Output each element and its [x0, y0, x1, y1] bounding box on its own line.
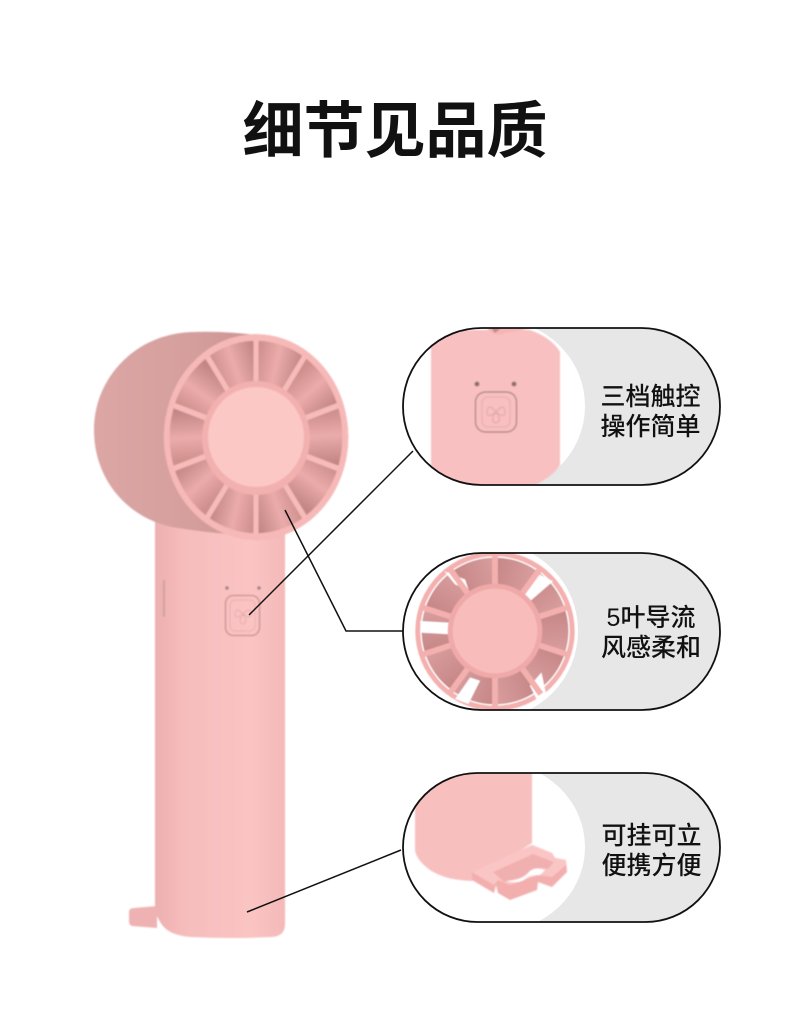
indicator lights: [225, 586, 261, 590]
close-up fan base: [415, 773, 532, 881]
white air slits: [420, 571, 553, 704]
caption: [600, 383, 701, 441]
hook opening: [493, 854, 554, 882]
callout pill: hook: [402, 772, 721, 923]
caption: [601, 822, 702, 880]
caption: [601, 604, 701, 662]
product: pink handheld fan: [94, 318, 360, 938]
callout pill: fan blades: [402, 543, 720, 719]
title: 细节见品质: [242, 97, 548, 165]
fan centre hub: [202, 381, 310, 495]
white backdrop circle: [511, 554, 578, 709]
panel background: [403, 328, 720, 485]
close-up fan grille: [414, 554, 576, 710]
callout pill: touch control: [403, 320, 720, 492]
close-up hook: [472, 862, 568, 900]
caption: 三档触控: [600, 383, 701, 411]
leader line: touch button to callout: [249, 451, 413, 615]
fan handle: [155, 510, 285, 938]
fan hanging hook at base: [129, 906, 157, 928]
white backdrop circle: [524, 329, 585, 468]
panel background: [403, 773, 720, 922]
close-up handle: [431, 330, 560, 487]
caption: 风感柔和: [601, 634, 701, 662]
caption: 操作简单: [600, 413, 701, 441]
panel background: [403, 553, 720, 710]
caption: 5叶导流: [607, 604, 695, 632]
close-up touch button: [476, 392, 516, 432]
leader line: blades to callout: [285, 510, 403, 631]
touch button: [226, 596, 260, 636]
white backdrop circle: [493, 774, 585, 921]
caption: 便携方便: [601, 852, 702, 880]
leader line: base to callout: [247, 850, 401, 912]
caption: 可挂可立: [601, 822, 702, 850]
close-up indicator lights: [475, 382, 516, 386]
fan rear housing: [94, 332, 262, 535]
fan front grille: [152, 318, 360, 556]
side slot: [163, 580, 165, 617]
